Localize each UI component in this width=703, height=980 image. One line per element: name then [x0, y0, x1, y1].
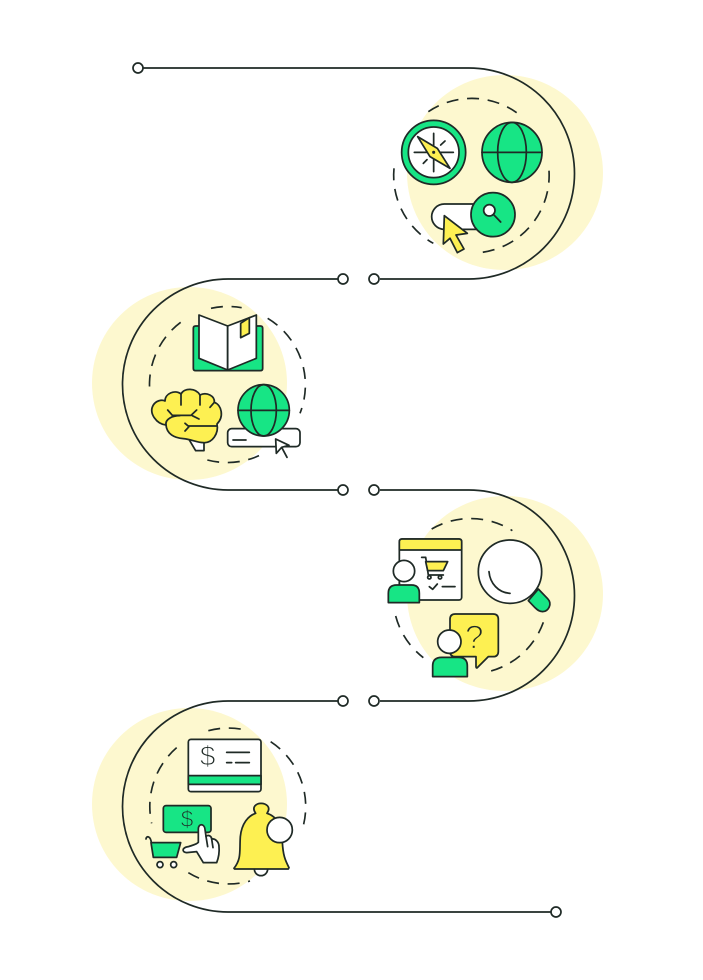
timeline connector: step 3: [369, 485, 575, 706]
blob: step 4 background: [92, 708, 287, 901]
panel: step 4 icons: [146, 728, 306, 884]
panel: step 1 icons: [394, 98, 549, 253]
blob: step 2 background: [92, 287, 287, 480]
icon: brain: [152, 389, 221, 451]
label: question mark: ?: [465, 619, 484, 656]
timeline connector: step 1: [133, 63, 575, 284]
icon: notification bell: [234, 803, 292, 876]
timeline connector: step 2: [123, 274, 348, 495]
blob: step 1 background: [407, 75, 603, 270]
panel: step 3 icons: [388, 519, 550, 677]
icon: question speech bubble with person: [433, 614, 498, 677]
icon: globe in browser bar: [228, 385, 300, 457]
icon: payment card: [188, 739, 261, 792]
icon: pointing hand: [183, 825, 219, 863]
icon: compass: [402, 120, 466, 184]
timeline connector: step 4: [123, 696, 561, 917]
blob: step 3 background: [407, 496, 603, 691]
icon: globe: [482, 122, 542, 182]
panel: step 2 icons: [150, 306, 305, 463]
icon: search bar with cursor: [432, 193, 515, 253]
icon: banknote: [163, 806, 211, 832]
label: dollar sign on banknote: $: [181, 806, 194, 832]
icon: online store window: [388, 539, 462, 603]
label: dollar sign on card: $: [200, 741, 216, 772]
icon: magnifying glass: [478, 540, 550, 612]
icon: shopping cart: [146, 837, 181, 868]
icon: open book: [193, 315, 263, 371]
